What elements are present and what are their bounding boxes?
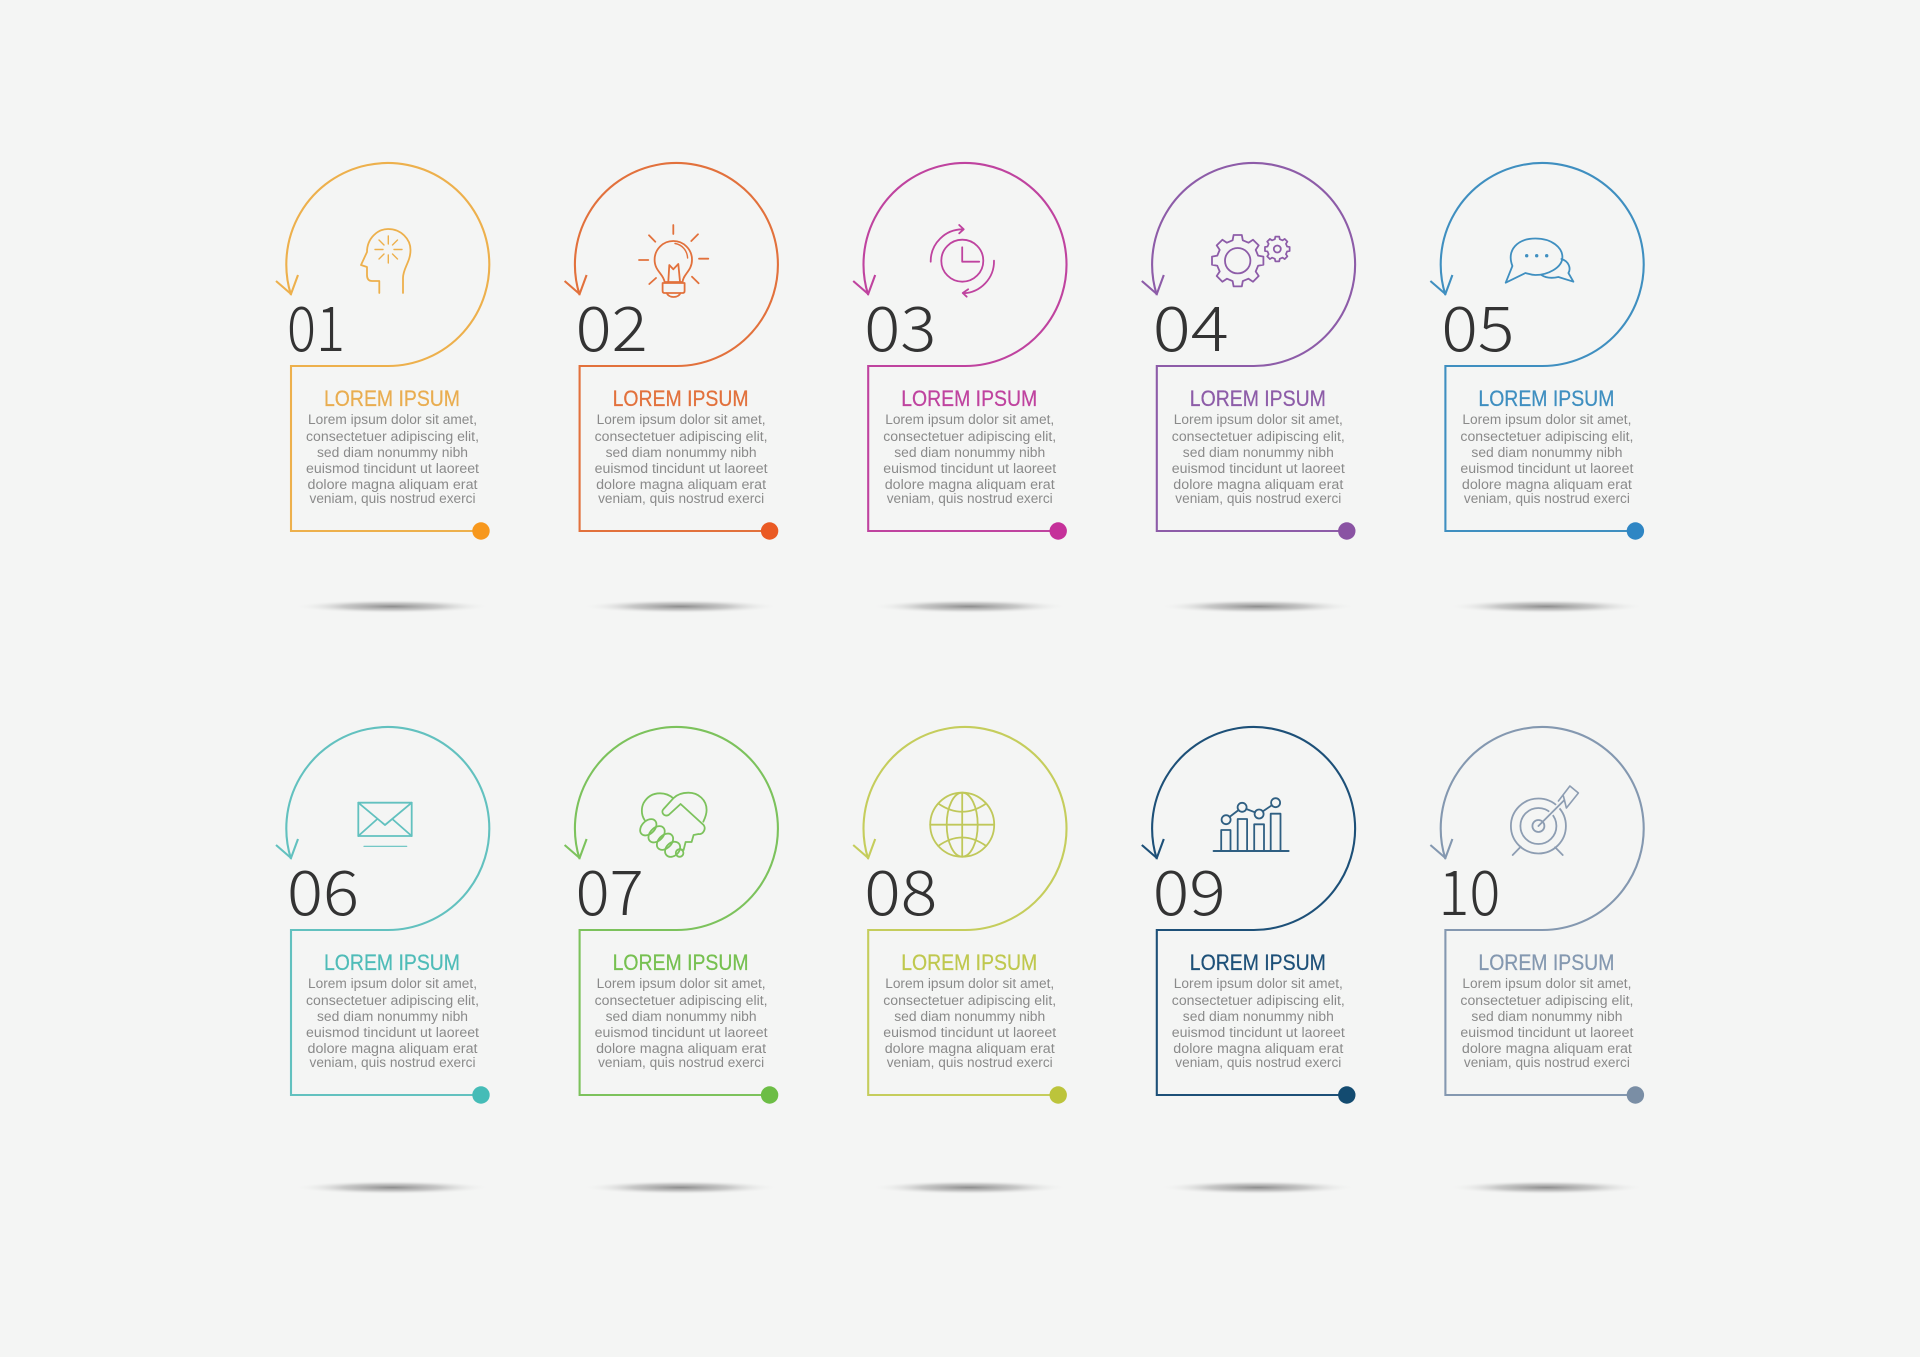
icon: head with idea [361, 229, 410, 293]
number: 07 [576, 843, 644, 933]
body text: consectetuer adipiscing elit, [1460, 993, 1633, 1008]
body text: dolore magna aliquam erat [1462, 1041, 1632, 1056]
body text: sed diam nonummy nibh [317, 1009, 468, 1024]
panel: step 04 [1142, 163, 1356, 540]
body text: dolore magna aliquam erat [1173, 477, 1344, 492]
panel: step 01 [276, 163, 490, 540]
body text: euismod tincidunt ut laoreet [1460, 1025, 1634, 1040]
body text [883, 976, 1056, 1070]
body text: dolore magna aliquam erat [596, 1041, 766, 1056]
icon: bar and line chart [1214, 798, 1289, 851]
body text: veniam, quis nostrud exerci [310, 1055, 476, 1070]
body text [1460, 412, 1634, 506]
shadow 04 [1160, 600, 1356, 614]
shadow 08 [871, 1180, 1067, 1194]
heading: LOREM IPSUM [1478, 386, 1614, 411]
end dot [761, 522, 778, 540]
body text: dolore magna aliquam erat [885, 1041, 1055, 1056]
end dot [472, 1086, 490, 1104]
body text: euismod tincidunt ut laoreet [1172, 1025, 1345, 1040]
body text: Lorem ipsum dolor sit amet, [597, 412, 766, 427]
body text: Lorem ipsum dolor sit amet, [597, 976, 766, 991]
body text: dolore magna aliquam erat [1173, 1041, 1344, 1056]
panel: step 10 [1430, 727, 1644, 1104]
outline with arrow [853, 727, 1067, 1095]
body text: sed diam nonummy nibh [606, 1009, 757, 1024]
shadow 03 [871, 600, 1067, 614]
outline with arrow [565, 163, 778, 531]
body text: veniam, quis nostrud exerci [887, 491, 1053, 506]
body text: veniam, quis nostrud exerci [598, 1055, 764, 1070]
number: 10 [1438, 843, 1500, 933]
number: 09 [1153, 843, 1226, 933]
body text [1460, 976, 1634, 1070]
shadow 01 [294, 600, 490, 614]
body text: veniam, quis nostrud exerci [598, 491, 764, 506]
shadow 09 [1160, 1180, 1356, 1194]
number: 01 [287, 279, 345, 369]
number: 04 [1153, 279, 1229, 369]
body text [306, 976, 479, 1070]
shadow 05 [1448, 600, 1644, 614]
heading: LOREM IPSUM [613, 950, 749, 975]
heading: LOREM IPSUM [1190, 386, 1326, 411]
end dot [1050, 1086, 1067, 1104]
body text: consectetuer adipiscing elit, [883, 993, 1056, 1008]
number: 08 [864, 843, 937, 933]
number: 03 [864, 279, 936, 369]
outline with arrow [276, 163, 489, 531]
panel: step 02 [565, 163, 778, 540]
body text: consectetuer adipiscing elit, [1172, 993, 1345, 1008]
shadow 06 [294, 1180, 490, 1194]
body text: consectetuer adipiscing elit, [595, 993, 768, 1008]
body text: sed diam nonummy nibh [894, 1009, 1045, 1024]
body text: Lorem ipsum dolor sit amet, [1174, 412, 1343, 427]
body text: sed diam nonummy nibh [1471, 445, 1622, 460]
body text [595, 412, 768, 506]
body text: euismod tincidunt ut laoreet [883, 1025, 1056, 1040]
body text: veniam, quis nostrud exerci [1464, 491, 1630, 506]
body text: veniam, quis nostrud exerci [1175, 1055, 1341, 1070]
number: 06 [287, 843, 359, 933]
heading: LOREM IPSUM [324, 950, 460, 975]
panel: step 07 [565, 727, 778, 1104]
body text: euismod tincidunt ut laoreet [595, 461, 768, 476]
heading: LOREM IPSUM [1190, 950, 1326, 975]
body text: dolore magna aliquam erat [308, 1041, 478, 1056]
body text: sed diam nonummy nibh [1183, 445, 1334, 460]
body text [883, 412, 1056, 506]
number: 02 [576, 279, 648, 369]
body text: euismod tincidunt ut laoreet [1460, 461, 1634, 476]
body text: consectetuer adipiscing elit, [1460, 429, 1633, 444]
body text: veniam, quis nostrud exerci [310, 491, 476, 506]
outline with arrow [565, 727, 778, 1095]
body text: sed diam nonummy nibh [606, 445, 757, 460]
outline with arrow [1142, 727, 1355, 1095]
shadow 10 [1448, 1180, 1644, 1194]
body text: veniam, quis nostrud exerci [1175, 491, 1341, 506]
shadow 02 [583, 600, 779, 614]
body text: consectetuer adipiscing elit, [306, 993, 479, 1008]
icon: envelope [358, 803, 412, 846]
end dot [761, 1086, 778, 1104]
number: 05 [1441, 279, 1514, 369]
body text: dolore magna aliquam erat [596, 477, 766, 492]
body text: Lorem ipsum dolor sit amet, [308, 412, 477, 427]
heading: LOREM IPSUM [613, 386, 749, 411]
panel: step 09 [1142, 727, 1356, 1104]
shadow 07 [583, 1180, 779, 1194]
body text: sed diam nonummy nibh [1471, 1009, 1622, 1024]
body text: sed diam nonummy nibh [894, 445, 1045, 460]
icon: handshake heart [637, 793, 707, 860]
end dot [472, 522, 490, 540]
body text: Lorem ipsum dolor sit amet, [308, 976, 477, 991]
body text [1172, 412, 1345, 506]
body text: euismod tincidunt ut laoreet [883, 461, 1056, 476]
panel: step 05 [1430, 163, 1644, 540]
heading: LOREM IPSUM [324, 386, 460, 411]
heading: LOREM IPSUM [1478, 950, 1614, 975]
icon: light bulb [639, 225, 708, 297]
body text: Lorem ipsum dolor sit amet, [1462, 976, 1631, 991]
body text: euismod tincidunt ut laoreet [306, 461, 479, 476]
body text: dolore magna aliquam erat [1462, 477, 1632, 492]
body text [1172, 976, 1345, 1070]
body text: euismod tincidunt ut laoreet [1172, 461, 1345, 476]
icon: chat bubbles [1506, 238, 1573, 283]
outline with arrow [1430, 727, 1644, 1095]
icon: target with arrow [1511, 786, 1578, 855]
body text: Lorem ipsum dolor sit amet, [885, 412, 1054, 427]
body text [306, 412, 479, 506]
end dot [1338, 1086, 1356, 1104]
end dot [1627, 522, 1644, 540]
body text: veniam, quis nostrud exerci [1464, 1055, 1630, 1070]
panel: step 08 [853, 727, 1067, 1104]
body text: dolore magna aliquam erat [308, 477, 478, 492]
body text: consectetuer adipiscing elit, [306, 429, 479, 444]
end dot [1627, 1086, 1644, 1104]
body text: sed diam nonummy nibh [317, 445, 468, 460]
panel: step 03 [853, 163, 1067, 540]
body text: consectetuer adipiscing elit, [1172, 429, 1345, 444]
body text [595, 976, 768, 1070]
outline with arrow [276, 727, 489, 1095]
outline with arrow [1142, 163, 1355, 531]
heading: LOREM IPSUM [901, 386, 1037, 411]
body text: euismod tincidunt ut laoreet [306, 1025, 479, 1040]
body text: Lorem ipsum dolor sit amet, [885, 976, 1054, 991]
body text: sed diam nonummy nibh [1183, 1009, 1334, 1024]
outline with arrow [1430, 163, 1644, 531]
end dot [1338, 522, 1356, 540]
end dot [1050, 522, 1067, 540]
heading: LOREM IPSUM [901, 950, 1037, 975]
panel: step 06 [276, 727, 490, 1104]
icon: globe [930, 793, 994, 857]
icon: gears [1212, 235, 1290, 286]
body text: dolore magna aliquam erat [885, 477, 1055, 492]
body text: consectetuer adipiscing elit, [595, 429, 768, 444]
icon: clock with rotating arrows [931, 225, 994, 297]
body text: euismod tincidunt ut laoreet [595, 1025, 768, 1040]
body text: consectetuer adipiscing elit, [883, 429, 1056, 444]
outline with arrow [853, 163, 1067, 531]
body text: veniam, quis nostrud exerci [887, 1055, 1053, 1070]
body text: Lorem ipsum dolor sit amet, [1174, 976, 1343, 991]
body text: Lorem ipsum dolor sit amet, [1462, 412, 1631, 427]
